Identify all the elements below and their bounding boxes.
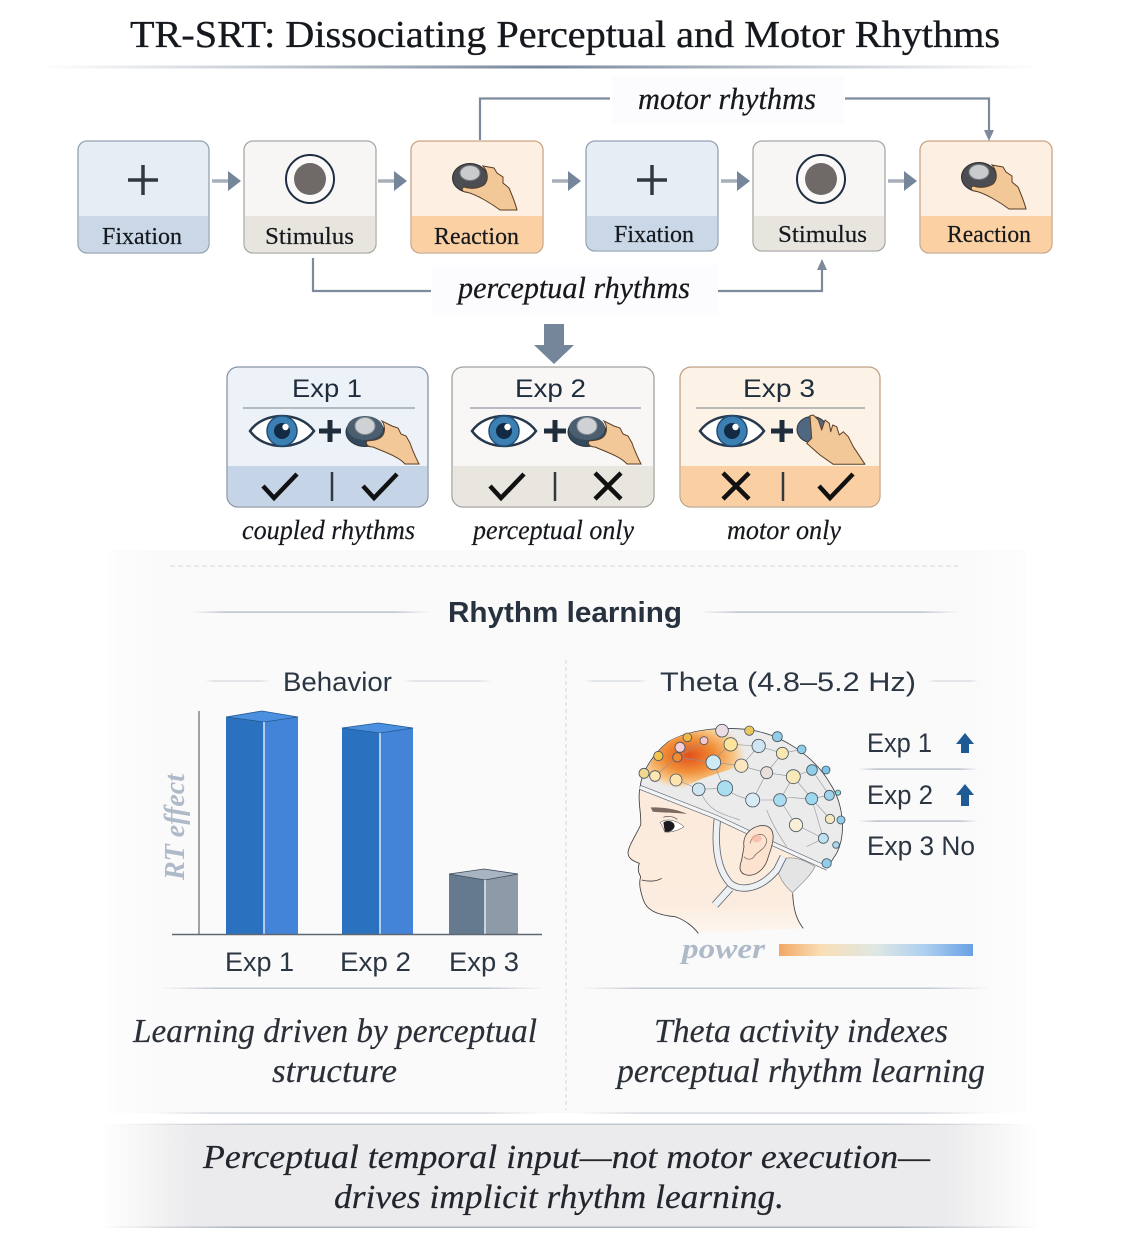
bar chart: [160, 711, 542, 977]
icon: tapping hand: [797, 415, 865, 464]
icon: eye: [472, 416, 536, 446]
legend: theta by experiment: Exp 2: [867, 780, 933, 810]
step: fixation 2: Fixation: [614, 222, 694, 248]
electrode network: [655, 741, 830, 847]
icon: eye: [250, 416, 314, 446]
heading: theta: Theta (4.8–5.2 Hz): [660, 667, 916, 697]
perceptual rhythms connector: [313, 258, 827, 315]
title: TR-SRT: Dissociating Perceptual and Motor Rhythms: [130, 14, 1000, 56]
bar: Exp 3: [449, 869, 518, 934]
panel: experiment 1: [227, 367, 428, 507]
icon: eye: [700, 416, 764, 446]
panel: experiment 1: Exp 1: [292, 375, 362, 403]
icon: cross perceptual: [723, 473, 749, 499]
panel: experiment 3: Exp 3: [743, 375, 815, 403]
bar: Exp 2: [342, 723, 413, 934]
panel: experiment 2: Exp 2: [515, 375, 586, 403]
perceptual rhythms connector: perceptual rhythms: [456, 270, 690, 305]
colour legend: power: [679, 933, 973, 965]
illustration: head with EEG cap: [628, 724, 845, 933]
caption: theta: Theta activity indexes: [654, 1013, 948, 1050]
caption: theta: [615, 1013, 985, 1090]
icon: plus: [319, 420, 341, 442]
icon: check motor: [819, 474, 853, 498]
axis labels: Exp 3: [449, 947, 519, 977]
step: fixation 1: [78, 141, 209, 253]
caption: behavior: [132, 1013, 537, 1090]
cap band: [640, 787, 827, 868]
big down arrow: [534, 324, 574, 364]
motor rhythms connector: [480, 76, 994, 141]
step: reaction 2: Reaction: [947, 222, 1031, 248]
panel: experiment 2: [452, 367, 654, 507]
arrow: [888, 171, 917, 191]
icon: button and hand: [346, 416, 419, 464]
panel: conclusion: Perceptual temporal input—not motor execution—: [202, 1139, 931, 1176]
heading: rhythm learning: Rhythm learning: [448, 597, 682, 629]
icon: plus: [771, 420, 793, 442]
label: perceptual only: perceptual only: [471, 515, 634, 545]
cap: [640, 728, 842, 868]
heading: behavior: Behavior: [283, 667, 392, 697]
motor rhythms connector: motor rhythms: [638, 81, 816, 116]
arrow: [721, 171, 750, 191]
step: stimulus 2: [753, 141, 885, 251]
hair net at back: [777, 858, 815, 893]
panel: conclusion: [100, 1124, 1040, 1228]
step: fixation 1: Fixation: [102, 224, 182, 250]
icon: plus: [544, 420, 566, 442]
label: motor only: motor only: [727, 515, 841, 545]
step: stimulus 1: [244, 141, 376, 253]
hot spot: [642, 729, 747, 792]
bar: Exp 1: [226, 711, 298, 934]
eyebrow and eye: [651, 807, 687, 814]
icon: check perceptual: [263, 474, 297, 498]
panel: trial sequence: [78, 141, 1052, 253]
arrow: [212, 171, 241, 191]
step: stimulus 2: Stimulus: [778, 222, 867, 248]
legend: theta by experiment: [858, 728, 978, 861]
caption: theta: perceptual rhythm learning: [615, 1053, 985, 1090]
icon: check motor: [363, 474, 397, 498]
arrow: [378, 171, 407, 191]
panel: experiment 3: [680, 367, 880, 507]
icon: up arrow: [956, 733, 974, 753]
label: coupled rhythms: coupled rhythms: [242, 515, 415, 545]
step: reaction 2: [920, 141, 1052, 253]
step: fixation 2: [586, 141, 718, 251]
arrow: [552, 171, 581, 191]
step: reaction 1: [411, 141, 543, 253]
electrodes: [639, 724, 845, 868]
icon: up arrow: [956, 784, 974, 806]
legend: theta by experiment: Exp 1: [867, 728, 932, 758]
caption: behavior: Learning driven by perceptual: [132, 1013, 537, 1050]
legend: theta by experiment: Exp 3 No: [867, 831, 975, 861]
step: reaction 1: Reaction: [434, 224, 519, 250]
step: stimulus 1: Stimulus: [265, 224, 354, 250]
axis labels: Exp 2: [340, 947, 411, 977]
neck and face: [628, 787, 813, 933]
axis labels: [225, 947, 519, 977]
colour legend: power: power: [679, 933, 766, 965]
panel: rhythm learning: [107, 550, 1026, 1114]
icon: check perceptual: [490, 474, 524, 498]
ear: [740, 826, 773, 875]
chin strap: [716, 819, 783, 888]
axis label: RT effect: RT effect: [160, 773, 191, 881]
caption: behavior: structure: [272, 1053, 397, 1090]
icon: cross motor: [595, 473, 621, 499]
axis labels: Exp 1: [225, 947, 294, 977]
icon: button and hand: [568, 416, 641, 464]
panel: conclusion: drives implicit rhythm learning.: [334, 1179, 784, 1216]
